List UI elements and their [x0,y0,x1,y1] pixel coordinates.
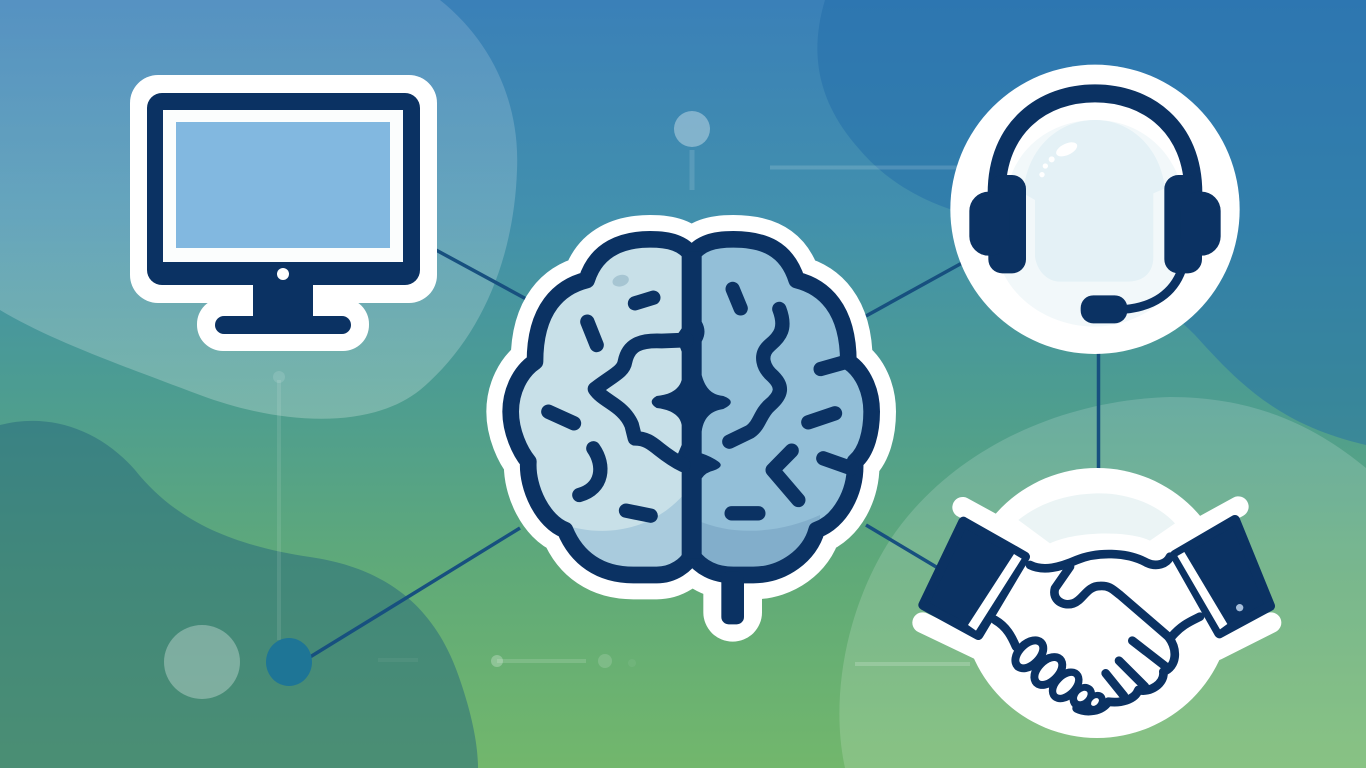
brain central fissure [652,252,731,558]
right cuff [1175,520,1270,633]
fingers of left hand [1004,629,1110,718]
faint decorative line bottom [378,654,970,668]
brain stem [721,572,744,624]
white hands [1000,557,1200,713]
background blob: top left [0,0,517,419]
icon: computer monitor [130,75,437,351]
brain left and right hemispheres [519,248,864,567]
pale dot bottom left [164,625,240,699]
clasped hands [995,554,1200,711]
headset band [997,93,1193,193]
headset inner glass dome [1003,120,1183,327]
headset ear cups [969,175,1221,273]
icon: headset [950,65,1240,354]
faint decorative node top [674,111,958,190]
headset microphone [1081,270,1182,323]
brain sticker outline [511,239,872,612]
faint decorative line left [273,371,285,640]
handshake sticker bands beside cuffs [923,507,1271,650]
background blob: bottom right [839,397,1366,768]
pale arc [1018,493,1175,543]
icon: handshake [923,468,1271,738]
connector lines [310,250,1098,657]
brain folds [548,289,852,516]
background blob: top right [817,0,1366,445]
background blob: bottom left [0,421,478,768]
teal node bottom left [266,638,312,686]
icon: brain [480,205,905,624]
left cuff [923,522,1025,635]
brain outline [511,239,872,575]
